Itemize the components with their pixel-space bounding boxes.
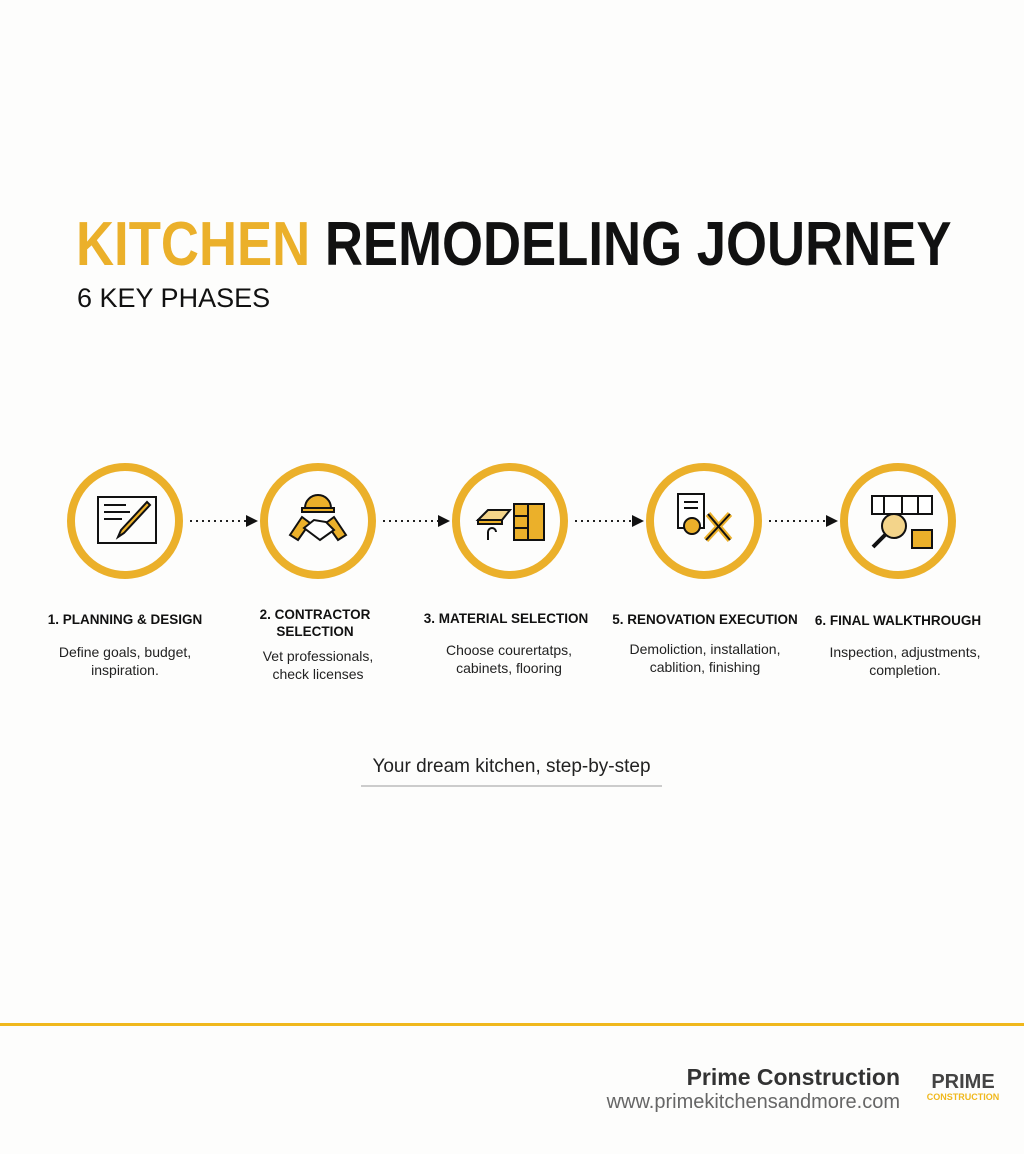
step 1 desc: Define goals, budget, [59, 644, 191, 660]
logo: CONSTRUCTION [927, 1092, 999, 1102]
step 6 desc [830, 644, 980, 678]
icon: blueprint pencil [98, 497, 156, 543]
title: KITCHEN REMODELING JOURNEY [76, 210, 952, 279]
step 2 desc [262, 648, 373, 682]
step 2 desc: Vet professionals, [263, 648, 373, 664]
step 3 desc: cabinets, flooring [456, 660, 562, 676]
step 2 desc: check licenses [272, 666, 364, 682]
icon: checklist tools [678, 494, 730, 540]
step 3 desc: Choose courertatps, [446, 642, 572, 658]
step 2 label: SELECTION [276, 624, 354, 639]
arrows [190, 520, 826, 522]
logo: PRIME [931, 1071, 995, 1093]
tagline [361, 756, 662, 787]
step 5 desc [630, 641, 780, 675]
step 5 desc: Demoliction, installation, [630, 641, 780, 657]
step 3 label: 3. MATERIAL SELECTION [424, 611, 588, 626]
icon: handshake [290, 495, 346, 540]
step 6 label: 6. FINAL WALKTHROUGH [815, 613, 981, 628]
step 5 desc: cablition, finishing [650, 659, 760, 675]
circle 5 [844, 467, 952, 575]
step 2 label: 2. CONTRACTOR [260, 607, 370, 622]
step 2 label [260, 607, 370, 639]
step 5 label: 5. RENOVATION EXECUTION [612, 612, 798, 627]
circle 2 [264, 467, 372, 575]
icon: materials [478, 504, 544, 540]
footer company: Prime Construction [687, 1064, 900, 1090]
footer company [606, 1064, 900, 1113]
step 1 desc [59, 644, 191, 678]
footer company: www.primekitchensandmore.com [607, 1091, 900, 1113]
step 3 desc [446, 642, 572, 676]
process diagram [67, 463, 956, 579]
subtitle: 6 KEY PHASES [77, 283, 270, 313]
logo [927, 1071, 999, 1102]
step 6 desc: Inspection, adjustments, [830, 644, 980, 660]
step 6 desc: completion. [869, 662, 941, 678]
circle 3 [456, 467, 564, 575]
tagline: Your dream kitchen, step-by-step [372, 756, 651, 777]
icon: inspection [872, 496, 932, 548]
circle 4 [650, 467, 758, 575]
step 1 label: 1. PLANNING & DESIGN [48, 612, 202, 627]
step 1 desc: inspiration. [91, 662, 159, 678]
circle 1 [71, 467, 179, 575]
footer rule [0, 1023, 1024, 1026]
